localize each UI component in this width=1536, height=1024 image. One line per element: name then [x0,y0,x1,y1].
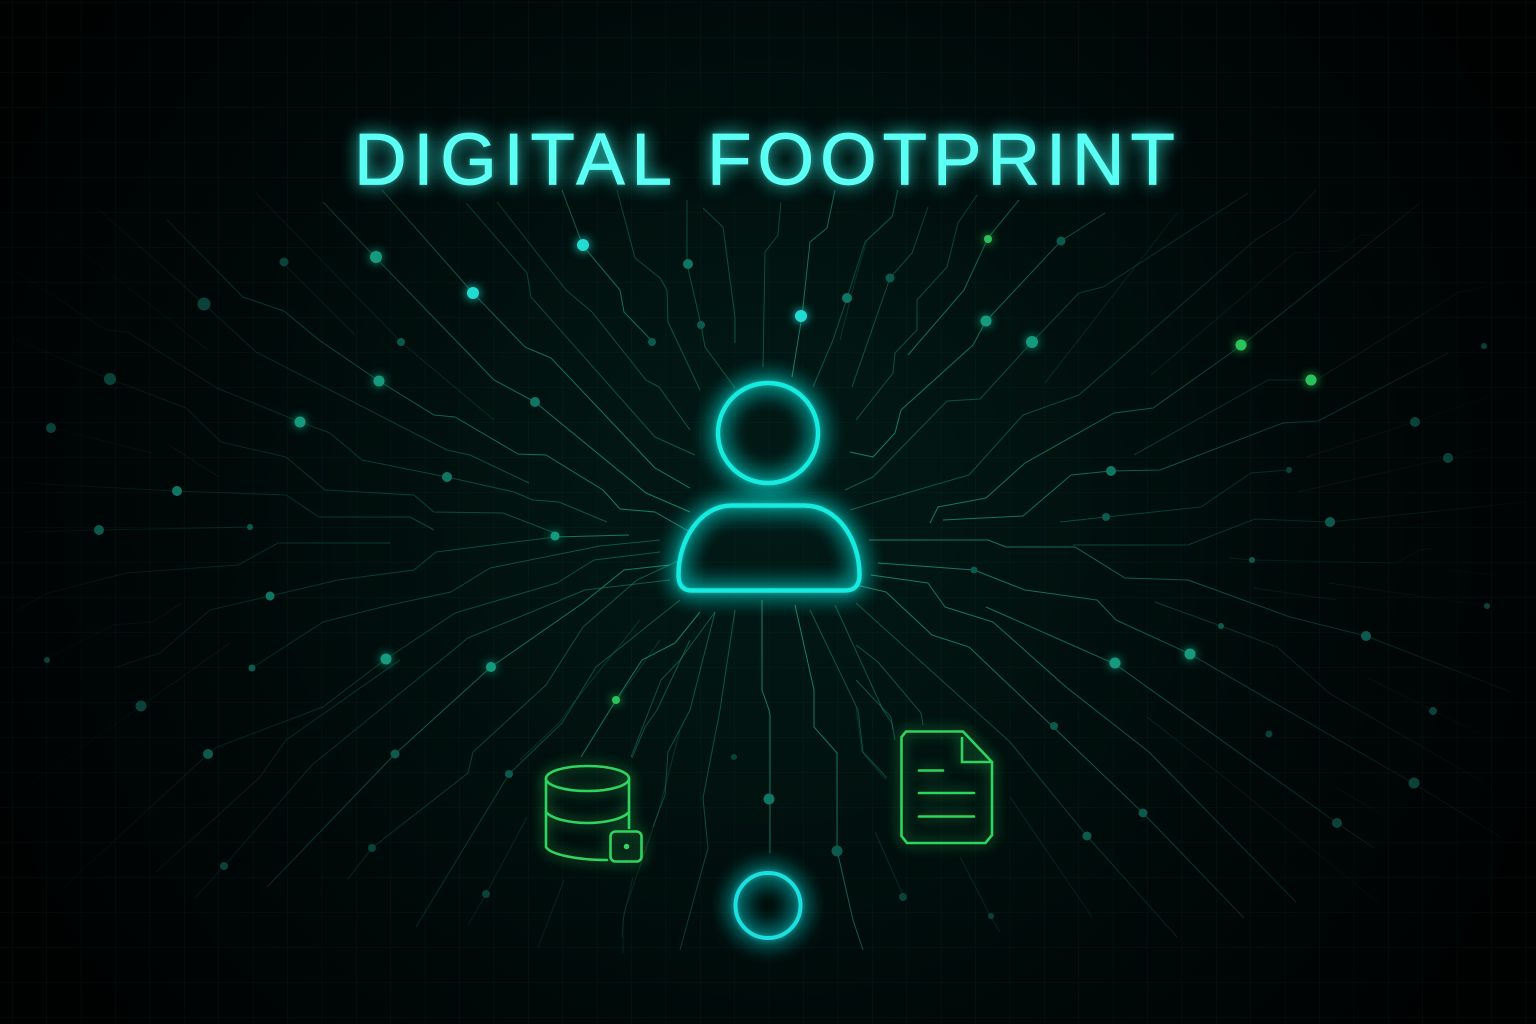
user head [718,383,818,483]
icon: document [902,732,992,843]
mid teal nodes [294,251,1196,672]
darker nodes [94,236,1371,856]
icon: database with lock [546,766,642,862]
green nodes [612,235,1316,704]
faint nodes [44,258,1490,919]
icon: user [678,383,860,590]
dim nodes [172,259,1116,804]
bright nodes [467,239,807,322]
icon: circle [736,873,800,938]
title: FOOTPRINT [707,120,1175,200]
data nodes [44,235,1490,919]
network lines radiating from the user [13,190,1526,953]
title: DIGITAL [354,120,672,200]
user body [678,506,860,590]
title [354,120,1175,200]
